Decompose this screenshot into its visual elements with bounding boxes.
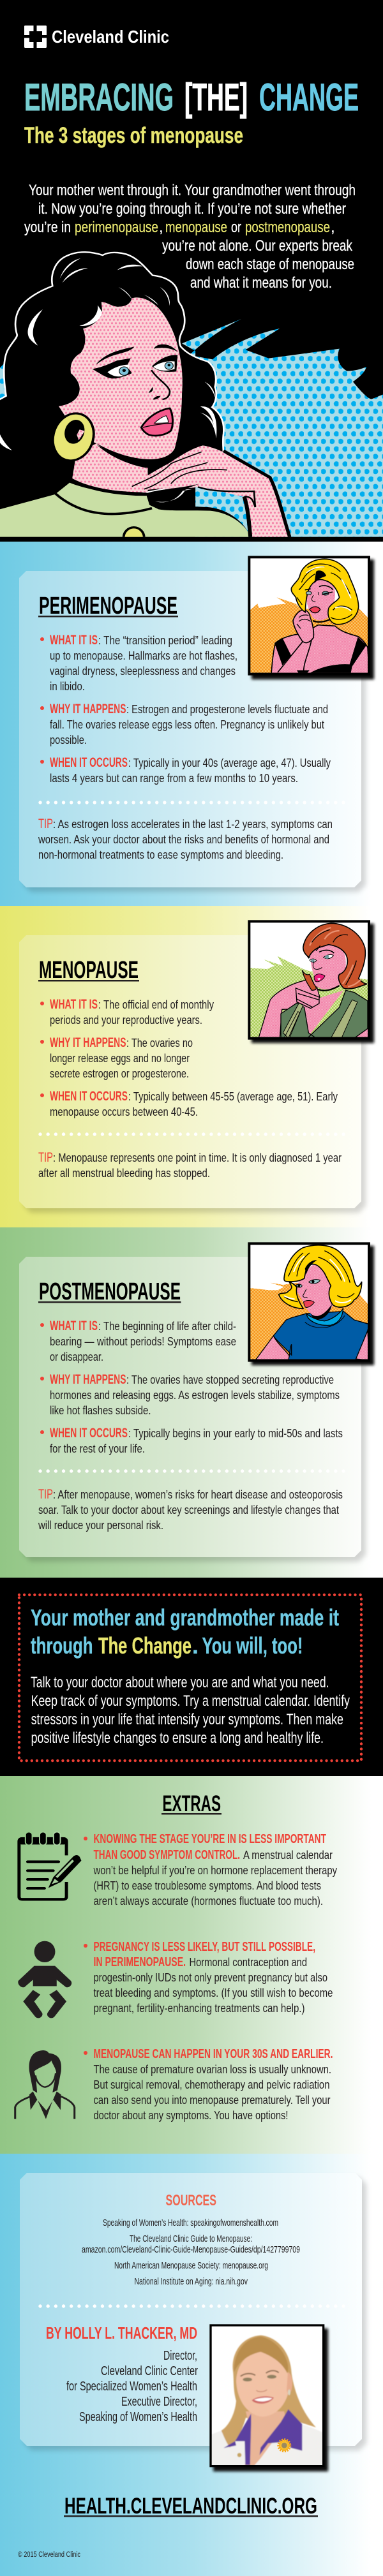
intro paragraph: , <box>331 219 335 236</box>
bullet: what it is <box>40 997 214 1026</box>
extras item 3: doctor about any symptoms. You have options! <box>93 2108 289 2122</box>
tip <box>38 1150 342 1180</box>
subtitle: The 3 stages of menopause <box>24 123 243 148</box>
extras item 2: pregnant, fertility-enhancing treatments can help.) <box>93 2001 305 2015</box>
extras item 2: Hormonal contraception and <box>189 1955 307 1969</box>
bullet: what it is <box>40 1319 236 1363</box>
extras item 3: The cause of premature ovarian loss is usually unknown. <box>93 2062 331 2076</box>
logo wordmark: Cleveland Clinic <box>52 27 169 47</box>
bullet: what it is: vaginal dryness, sleeplessness and changes <box>50 664 236 677</box>
brooch <box>123 526 146 537</box>
intro paragraph: perimenopause <box>75 219 158 236</box>
author byline: Cleveland Clinic Center <box>101 2364 198 2378</box>
callout body <box>31 1674 350 1747</box>
panel: perimenopause <box>0 542 383 906</box>
bullet: when it occurs <box>40 755 331 785</box>
neck <box>72 443 148 492</box>
heading <box>161 1791 222 1816</box>
portrait: blonde woman <box>249 557 374 679</box>
portrait: blonde woman in blue <box>249 1243 374 1365</box>
extras item 2: progestin-only IUDs not only prevent pregnancy but also <box>93 1971 327 1984</box>
bullet: why it happens: WHY IT HAPPENS <box>50 1372 126 1387</box>
intro paragraph: you’re in <box>24 219 71 236</box>
bullet: why it happens <box>40 1372 340 1417</box>
bullet: when it occurs <box>40 1426 343 1455</box>
callout heading: You will, too! <box>202 1632 303 1659</box>
author byline: Executive Director, <box>121 2394 197 2409</box>
bullet: what it is: : The beginning of life after child- <box>98 1319 236 1333</box>
hero panel background <box>0 0 383 542</box>
bullet: why it happens: : The ovaries no <box>126 1036 193 1049</box>
bullet: what it is: in libido. <box>50 679 85 693</box>
bullet: what it is: : The “transition period” leading <box>98 633 232 647</box>
tip: TIP <box>38 1150 53 1165</box>
bullet: when it occurs: WHEN IT OCCURS <box>50 1089 128 1104</box>
heading: EXTRAS <box>162 1791 221 1816</box>
extras item 1: (HRT) to ease troublesome symptoms. And blood tests <box>93 1879 321 1892</box>
nose <box>149 370 170 399</box>
bullet: why it happens: WHY IT HAPPENS <box>50 702 126 716</box>
card <box>19 935 361 1208</box>
card <box>19 571 361 887</box>
bullet: what it is: periods and your reproductive years. <box>50 1013 202 1026</box>
card <box>19 1257 361 1557</box>
copyright: © 2015 Cleveland Clinic <box>18 2551 80 2559</box>
hero illustration: woman with halftone burst <box>0 252 383 548</box>
panel: extras <box>0 1776 383 2154</box>
bullet: why it happens: possible. <box>50 733 87 746</box>
bullet: why it happens: : Estrogen and progesterone levels fluctuate and <box>126 702 328 716</box>
heading: MENOPAUSE <box>39 957 139 984</box>
callout heading <box>31 1604 339 1659</box>
icon: clipboard with pencil <box>19 1832 81 1899</box>
face <box>59 297 183 459</box>
bullet: when it occurs: WHEN IT OCCURS <box>50 1426 128 1440</box>
tip: after all menstrual bleeding has stopped. <box>38 1166 210 1180</box>
intro paragraph: or <box>231 219 241 236</box>
logo: Cleveland Clinic <box>24 26 169 48</box>
card <box>20 2173 362 2446</box>
sources list: amazon.com/Cleveland-Clinic-Guide-Menopause-Guides/dp/1427799709 <box>82 2245 300 2255</box>
author byline <box>46 2325 198 2424</box>
hair <box>0 252 223 521</box>
bullet: what it is: WHAT IT IS <box>50 1319 98 1333</box>
bullet: what it is: WHAT IT IS <box>50 633 98 648</box>
extras item 1: THAN GOOD SYMPTOM CONTROL. <box>93 1848 240 1862</box>
bullet: when it occurs: WHEN IT OCCURS <box>50 755 128 770</box>
sources list: North American Menopause Society: menopause.org <box>114 2261 268 2271</box>
lips <box>141 408 173 436</box>
left eye and brow <box>93 346 134 378</box>
bullet: when it occurs: lasts 4 years but can range from a few months to 10 years. <box>50 771 298 785</box>
bullet: why it happens: : The ovaries have stopped secreting reproductive <box>126 1373 334 1386</box>
pin: sunflower <box>279 2440 290 2451</box>
heading: PERIMENOPAUSE <box>39 593 177 619</box>
title: [THE] <box>184 76 248 119</box>
title: EMBRACING <box>24 76 174 119</box>
right eye and brow <box>152 344 178 372</box>
sources list <box>82 2218 300 2287</box>
bullet: when it occurs <box>40 1089 338 1118</box>
sources list: Speaking of Women’s Health: speakingofwomenshealth.com <box>103 2218 278 2228</box>
panel: menopause <box>0 906 383 1227</box>
intro paragraph: , <box>159 219 163 236</box>
tip <box>38 817 333 861</box>
author photo <box>211 2325 328 2471</box>
shirt <box>0 483 249 537</box>
bullet: what it is: bearing — without periods! Symptoms ease <box>50 1335 236 1348</box>
extras item 2: IN PERIMENOPAUSE. <box>93 1955 186 1969</box>
intro paragraph: postmenopause <box>245 219 330 236</box>
bullet: why it happens: longer release eggs and no longer <box>50 1051 190 1065</box>
halftone burst <box>0 319 383 537</box>
extras item 3 <box>84 2047 333 2122</box>
author byline: for Specialized Women’s Health <box>66 2379 197 2394</box>
hand <box>132 445 290 537</box>
extras item 2 <box>84 1940 333 2015</box>
extras item 1: A menstrual calendar <box>243 1848 333 1862</box>
intro paragraph: menopause <box>165 219 227 236</box>
icon: Cleveland Clinic mark <box>24 26 47 48</box>
extras item 1 <box>84 1832 338 1907</box>
bullet: why it happens: WHY IT HAPPENS <box>50 1035 126 1050</box>
bullet: what it is: up to menopause. Hallmarks are hot flashes, <box>50 649 237 662</box>
icon: baby <box>18 1941 71 2018</box>
callout heading: The Change <box>98 1632 192 1659</box>
bullet: when it occurs: menopause occurs between 40-45. <box>50 1105 198 1118</box>
author byline: Director, <box>163 2348 197 2363</box>
panel: sources and author <box>0 2154 383 2576</box>
extras item 2: treat bleeding and symptoms. (If you still wish to become <box>93 1986 333 1999</box>
earring <box>54 412 95 461</box>
sources list: The Cleveland Clinic Guide to Menopause: <box>130 2234 252 2244</box>
bullet: when it occurs: : Typically in your 40s (average age, 47). Usually <box>128 756 331 769</box>
extras item 1: aren’t always accurate (hormones fluctuate too much). <box>93 1894 323 1907</box>
hair highlights <box>0 258 216 450</box>
bullet: why it happens: secrete estrogen or progesterone. <box>50 1067 189 1080</box>
tip <box>38 1487 343 1532</box>
tip: non-hormonal treatments to ease symptoms and bleeding. <box>38 848 283 861</box>
author byline: Speaking of Women’s Health <box>79 2409 197 2424</box>
collar lines <box>71 480 147 494</box>
panel: callout <box>0 1578 383 1776</box>
jaw shadow <box>96 444 148 468</box>
bullet: what it is: or disappear. <box>50 1350 103 1363</box>
bullet: why it happens <box>40 702 328 746</box>
callout heading: through <box>31 1632 93 1659</box>
bullet: why it happens <box>40 1035 193 1080</box>
bullet: what it is <box>40 633 237 693</box>
sources list: National Institute on Aging: nia.nih.gov <box>134 2277 248 2287</box>
tip: TIP <box>38 817 53 831</box>
bullet: why it happens: like hot flashes subside. <box>50 1403 151 1417</box>
intro paragraph <box>24 182 356 292</box>
extras item 3: can also send you into menopause prematurely. Tell your <box>93 2093 331 2106</box>
extras item 3: But surgical removal, chemotherapy and pelvic radiation <box>93 2078 329 2091</box>
sources heading: SOURCES <box>166 2192 216 2209</box>
author byline: BY HOLLY L. THACKER, MD <box>46 2325 197 2343</box>
heading: POSTMENOPAUSE <box>39 1278 181 1305</box>
bullet: what it is: : The official end of monthly <box>98 998 214 1011</box>
bullet: when it occurs: for the rest of your life. <box>50 1442 145 1455</box>
icon: woman <box>15 2050 75 2119</box>
callout heading: . <box>192 1632 199 1659</box>
intro paragraph: and what it means for you. <box>190 274 332 292</box>
tip: will reduce your personal risk. <box>38 1518 163 1532</box>
panel: postmenopause <box>0 1227 383 1578</box>
portrait: red-haired woman <box>249 921 374 1043</box>
bullet: what it is: WHAT IT IS <box>50 997 98 1012</box>
tip: TIP <box>38 1487 53 1502</box>
